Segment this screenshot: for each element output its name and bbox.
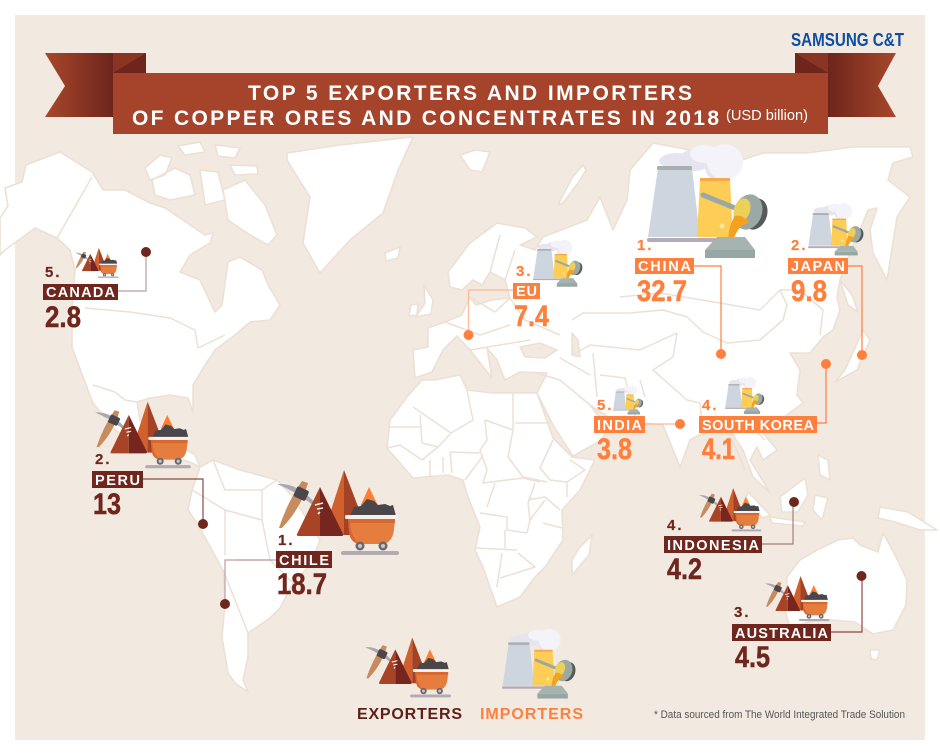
- connector: EU: [468, 290, 513, 335]
- map: Arctic islands: [145, 142, 586, 261]
- value: 18.7: [277, 568, 327, 601]
- value: 9.8: [791, 275, 827, 308]
- exporter: Canada: [43, 247, 151, 334]
- rank: 4.: [702, 397, 719, 414]
- map: Australia: [785, 533, 907, 634]
- icon: smelter: [533, 240, 584, 287]
- importer: India: [594, 386, 685, 466]
- map: Greenland: [287, 137, 413, 273]
- ribbon: right tail: [828, 53, 896, 117]
- map: North America: [0, 152, 280, 467]
- connector: India: [645, 423, 680, 425]
- exporter: Peru: [92, 402, 208, 529]
- icon: smelter: [725, 377, 766, 414]
- ribbon: left tail: [45, 53, 113, 117]
- connector: Japan: [848, 266, 862, 355]
- importer: South Korea: SOUTH KOREA: [702, 418, 815, 434]
- rank: 5.: [45, 264, 62, 281]
- connector: Australia: [831, 576, 862, 632]
- icon: mine: [277, 470, 399, 555]
- map: Great Britain and Ireland: [409, 285, 433, 317]
- ribbon: main band: [113, 73, 828, 134]
- exporter: Indonesia: INDONESIA: [667, 538, 760, 554]
- rank: 3.: [734, 604, 751, 621]
- exporter: Australia: [732, 571, 866, 674]
- value: 3.8: [597, 433, 632, 466]
- connector: Indonesia: [762, 502, 793, 544]
- value: 4.2: [667, 553, 702, 586]
- legend label: importers: IMPORTERS: [480, 706, 583, 723]
- title line 2: OF COPPER ORES AND CONCENTRATES IN 2018: [132, 107, 719, 130]
- connector: Chile: [225, 560, 276, 604]
- icon: mine: [95, 402, 191, 468]
- importer: EU: EU: [516, 284, 537, 300]
- country badge: [635, 258, 694, 274]
- value: 4.5: [735, 641, 770, 674]
- rank: 2.: [95, 451, 112, 468]
- ribbon: left tail back: [113, 53, 146, 73]
- importer: China: [635, 144, 772, 359]
- rank: 1.: [278, 532, 295, 549]
- legend: [357, 629, 583, 723]
- importer: South Korea: [699, 359, 831, 466]
- map: Eurasia: [413, 143, 913, 493]
- legend icon: importers: [502, 629, 578, 699]
- title unit: (USD billion): [726, 108, 808, 124]
- exporter: Australia: AUSTRALIA: [735, 626, 829, 642]
- map: South America: [188, 460, 320, 692]
- country badge: [92, 471, 143, 488]
- map: Japan and Sakhalin: [835, 280, 870, 382]
- importer: Japan: [788, 203, 867, 360]
- exporter: Chile: CHILE: [279, 553, 329, 569]
- map: Madagascar: [572, 535, 592, 575]
- value: 32.7: [637, 275, 687, 308]
- value: 7.4: [514, 300, 549, 333]
- title ribbon: [45, 53, 896, 134]
- exporter: Indonesia: [664, 488, 799, 586]
- map: Tasmania: [870, 650, 880, 660]
- rank: 3.: [516, 263, 533, 280]
- rank: 5.: [597, 397, 614, 414]
- ribbon: left fold: [113, 53, 146, 73]
- importer: EU: [464, 240, 584, 340]
- ribbon: right fold: [795, 53, 828, 73]
- rank: 1.: [637, 237, 654, 254]
- importer: India: INDIA: [597, 418, 643, 434]
- legend icon: exporters: [365, 637, 451, 697]
- icon: smelter: [647, 144, 772, 258]
- country badge: [664, 536, 762, 553]
- icon: mine: [699, 488, 761, 531]
- icon: smelter: [808, 203, 865, 255]
- map: inland seas: [520, 333, 610, 418]
- country badge: [788, 258, 848, 274]
- connector: South Korea: [817, 364, 826, 423]
- country badge: [594, 416, 645, 433]
- country badge: [732, 624, 831, 641]
- map: Southeast Asia islands: [745, 455, 830, 526]
- country badge: [43, 284, 118, 300]
- exporter: Peru: PERU: [95, 473, 140, 489]
- rank: 2.: [791, 237, 808, 254]
- importer: Japan: JAPAN: [791, 259, 845, 275]
- logo: Samsung C&T: SAMSUNG C&T: [791, 30, 904, 50]
- ribbon: right tail back: [795, 53, 828, 73]
- country badge: [513, 283, 540, 299]
- country badge: [276, 551, 332, 568]
- value: 4.1: [702, 433, 735, 466]
- value: 2.8: [45, 301, 81, 334]
- rank: 4.: [667, 517, 684, 534]
- icon: mine: [75, 248, 118, 278]
- importer: China: CHINA: [638, 259, 692, 275]
- icon: smelter: [613, 386, 644, 414]
- icon: mine: [765, 576, 830, 621]
- exporter: Chile: [220, 470, 399, 609]
- country badge: [699, 416, 817, 433]
- connector: Peru: [143, 479, 203, 524]
- map: country borders: [57, 177, 823, 633]
- map: Africa: [387, 375, 595, 607]
- source footnote: * Data sourced from The World Integrated Trade Solution: [654, 709, 905, 721]
- world map: [0, 137, 937, 692]
- title line 1: TOP 5 EXPORTERS AND IMPORTERS: [248, 82, 692, 105]
- connector: Canada: [118, 252, 146, 291]
- connector: China: [694, 266, 721, 354]
- value: 13: [93, 488, 121, 521]
- legend label: exporters: EXPORTERS: [357, 706, 462, 723]
- exporter: Canada: CANADA: [46, 285, 116, 301]
- map: New Guinea: [878, 507, 937, 530]
